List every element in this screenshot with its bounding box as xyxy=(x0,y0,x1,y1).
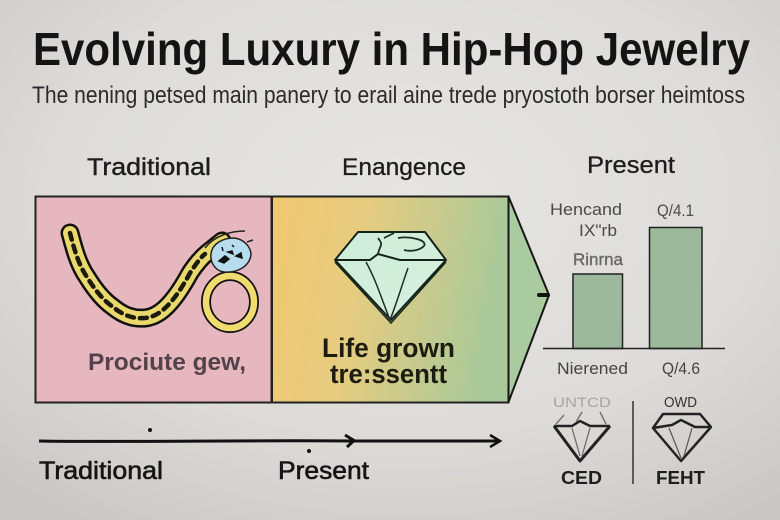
panel: emergence xyxy=(272,196,508,402)
timeline label: Traditional: Traditional xyxy=(39,457,163,485)
bar label: Hencand: Hencand xyxy=(550,200,622,219)
bar: Nierened xyxy=(573,274,622,348)
axis label: Nierened: Nierened xyxy=(557,359,628,378)
icon: outline diamond xyxy=(554,412,610,461)
label: CED: CED xyxy=(561,468,602,488)
heading: Enangence: Enangence xyxy=(342,154,466,181)
panel caption: tre:ssentt xyxy=(330,359,447,389)
arrow: panel pointer xyxy=(508,196,549,402)
bar chart xyxy=(543,200,725,378)
bar label: IX"rb: IX"rb xyxy=(579,221,617,240)
panel: traditional xyxy=(36,196,272,402)
icon: gold chain xyxy=(70,233,222,318)
comparison: CED xyxy=(553,394,611,488)
icon: diamond ring xyxy=(205,231,254,328)
icon: outline diamond xyxy=(653,414,711,461)
chart baseline xyxy=(543,348,725,350)
label above icon: UNTCD xyxy=(553,394,611,410)
timeline xyxy=(39,428,500,485)
divider between diamonds xyxy=(632,401,634,484)
label: FEHT: FEHT xyxy=(656,468,705,488)
panel caption: Life grown xyxy=(322,333,455,363)
label above icon: OWD xyxy=(664,394,697,411)
heading: Traditional: Traditional xyxy=(87,154,211,181)
bar: Q/4.1 xyxy=(650,228,702,348)
bar label: Rinrna: Rinrna xyxy=(573,250,624,269)
icon: lab-grown diamond xyxy=(335,232,446,323)
axis label: Q/4.6: Q/4.6 xyxy=(662,359,700,378)
bar label: Q/4.1: Q/4.1 xyxy=(657,201,694,220)
comparison: FEHT xyxy=(653,394,711,488)
arrow: timeline xyxy=(39,428,500,453)
timeline label: Present: Present xyxy=(278,457,369,485)
panel caption: Prociute gew, xyxy=(88,349,246,376)
heading: Present: Present xyxy=(587,152,675,179)
